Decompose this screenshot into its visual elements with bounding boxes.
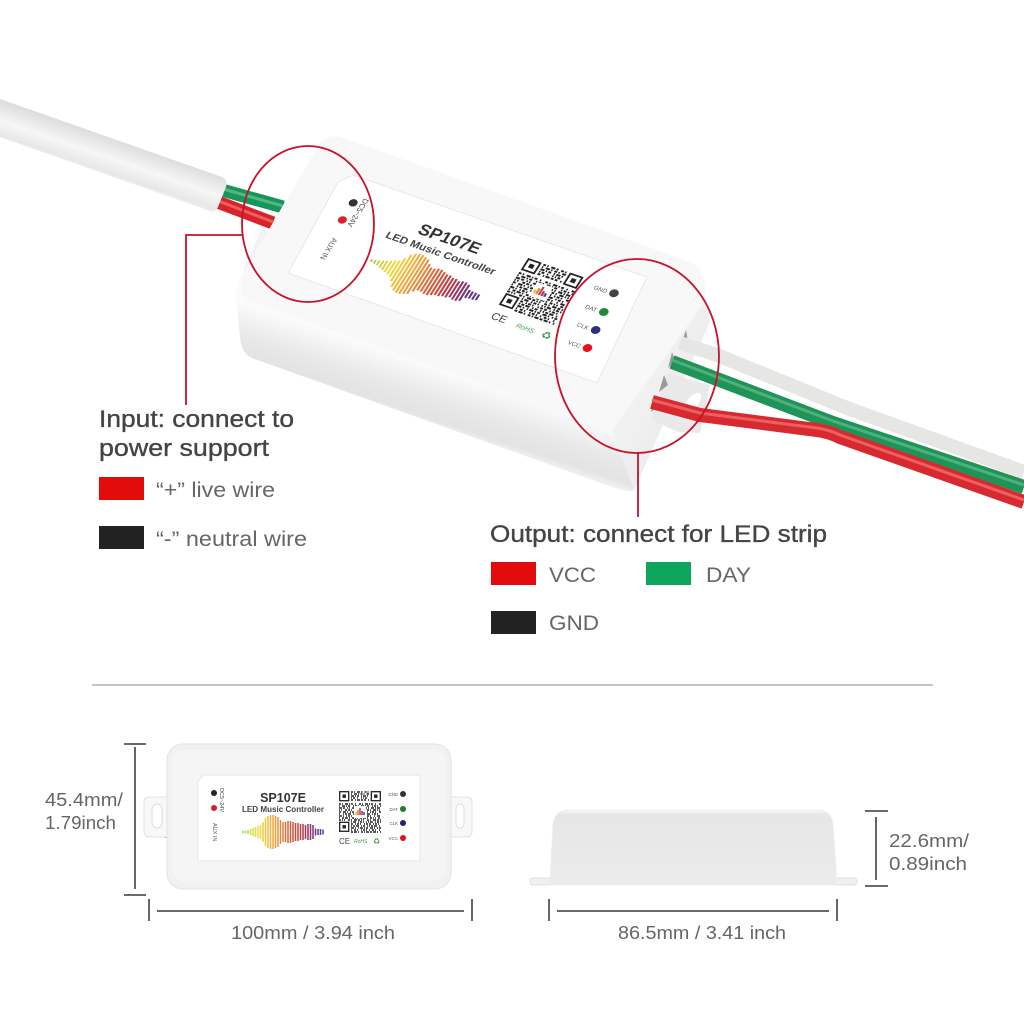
input heading bbox=[99, 406, 294, 462]
port indicators: GND bbox=[388, 792, 398, 797]
input polarity icons bbox=[336, 198, 359, 225]
waveform bbox=[243, 815, 323, 849]
output legend: GND: GND bbox=[549, 611, 599, 635]
output legend: VCC bbox=[491, 562, 596, 587]
RoHS mark: RoHS bbox=[354, 839, 368, 845]
height dimension, top view: 1.79inch bbox=[45, 812, 116, 833]
input legend: neutral wire: “-” neutral wire bbox=[156, 527, 307, 551]
housing top face bbox=[241, 136, 706, 430]
AUX IN text: AUX IN bbox=[318, 237, 340, 261]
waveform bbox=[359, 241, 490, 317]
recycling mark: ♻ bbox=[373, 837, 380, 846]
width dimension, top view: 100mm / 3.94 inch bbox=[231, 922, 395, 943]
output legend: GND bbox=[491, 611, 599, 635]
port indicators bbox=[559, 283, 627, 353]
output legend: DAY bbox=[646, 562, 751, 587]
port indicators bbox=[388, 791, 406, 841]
port indicators: DAT bbox=[390, 807, 398, 812]
wire nub bbox=[165, 824, 169, 838]
output legend: VCC: VCC bbox=[549, 563, 596, 587]
height dimension, side view bbox=[865, 811, 970, 886]
main controller photo illustration bbox=[236, 136, 1024, 502]
recycling mark: ♻ bbox=[538, 329, 554, 343]
input legend: live wire: “+” live wire bbox=[156, 478, 275, 502]
side view of controller bbox=[530, 810, 857, 885]
product name: SP107E bbox=[260, 791, 306, 805]
label bbox=[198, 775, 420, 861]
QR code bbox=[499, 259, 583, 324]
port indicators: GND bbox=[592, 285, 609, 295]
label content bbox=[211, 788, 406, 849]
height dimension, top view bbox=[45, 744, 146, 895]
QR code bbox=[339, 792, 381, 832]
product subtitle: LED Music Controller bbox=[242, 805, 324, 814]
ears bbox=[144, 797, 174, 837]
port indicators: DAT bbox=[583, 305, 598, 314]
leader line: output bbox=[637, 452, 639, 517]
width dimension, side view bbox=[549, 899, 837, 943]
product subtitle: LED Music Controller bbox=[383, 230, 499, 278]
body inner face bbox=[172, 750, 446, 881]
ear hole bbox=[682, 390, 704, 414]
housing end face bbox=[612, 300, 710, 490]
height dimension, side view: 22.6mm/ bbox=[889, 830, 970, 851]
input legend: live wire bbox=[99, 477, 275, 502]
label plate bbox=[288, 175, 647, 383]
port indicators: CLK bbox=[575, 323, 590, 332]
certification marks: CE bbox=[488, 311, 509, 326]
input heading: Input: connect to bbox=[99, 406, 294, 433]
port indicators: VCC bbox=[389, 836, 398, 841]
height dimension, top view: 45.4mm/ bbox=[45, 789, 124, 810]
divider bbox=[92, 684, 933, 686]
port indicators: VCC bbox=[566, 340, 582, 350]
input polarity icons bbox=[211, 790, 217, 811]
output legend: DAY: DAY bbox=[706, 563, 751, 587]
height dimension, side view: 0.89inch bbox=[889, 853, 967, 874]
input voltage text: DC5~24V bbox=[345, 198, 371, 228]
RoHS mark: RoHS bbox=[514, 323, 536, 335]
label printed content in perspective bbox=[310, 195, 629, 359]
top view of controller bbox=[144, 744, 472, 889]
body bbox=[167, 744, 451, 889]
input legend: neutral wire bbox=[99, 526, 307, 551]
width dimension, side view: 86.5mm / 3.41 inch bbox=[618, 922, 786, 943]
certification marks: CE bbox=[339, 837, 350, 846]
highlight circle: input bbox=[242, 146, 374, 302]
port notches bbox=[651, 330, 688, 412]
ear holes bbox=[152, 804, 464, 828]
product name: SP107E bbox=[414, 220, 486, 257]
width dimension, top view bbox=[149, 899, 472, 943]
highlight circle: output bbox=[555, 259, 719, 453]
output heading: Output: connect for LED strip bbox=[490, 521, 827, 548]
input voltage text: DC5~24V bbox=[218, 788, 224, 812]
input cable with exposed wires bbox=[0, 99, 283, 223]
port indicators: CLK bbox=[389, 821, 398, 826]
output wires bbox=[652, 343, 1024, 502]
AUX IN text: AUX IN bbox=[211, 823, 217, 841]
leader line: input bbox=[186, 235, 242, 405]
housing body bbox=[236, 136, 710, 491]
mounting ear: right bbox=[652, 373, 710, 433]
input heading: power support bbox=[99, 435, 269, 462]
mounting ear: left bbox=[243, 228, 276, 282]
